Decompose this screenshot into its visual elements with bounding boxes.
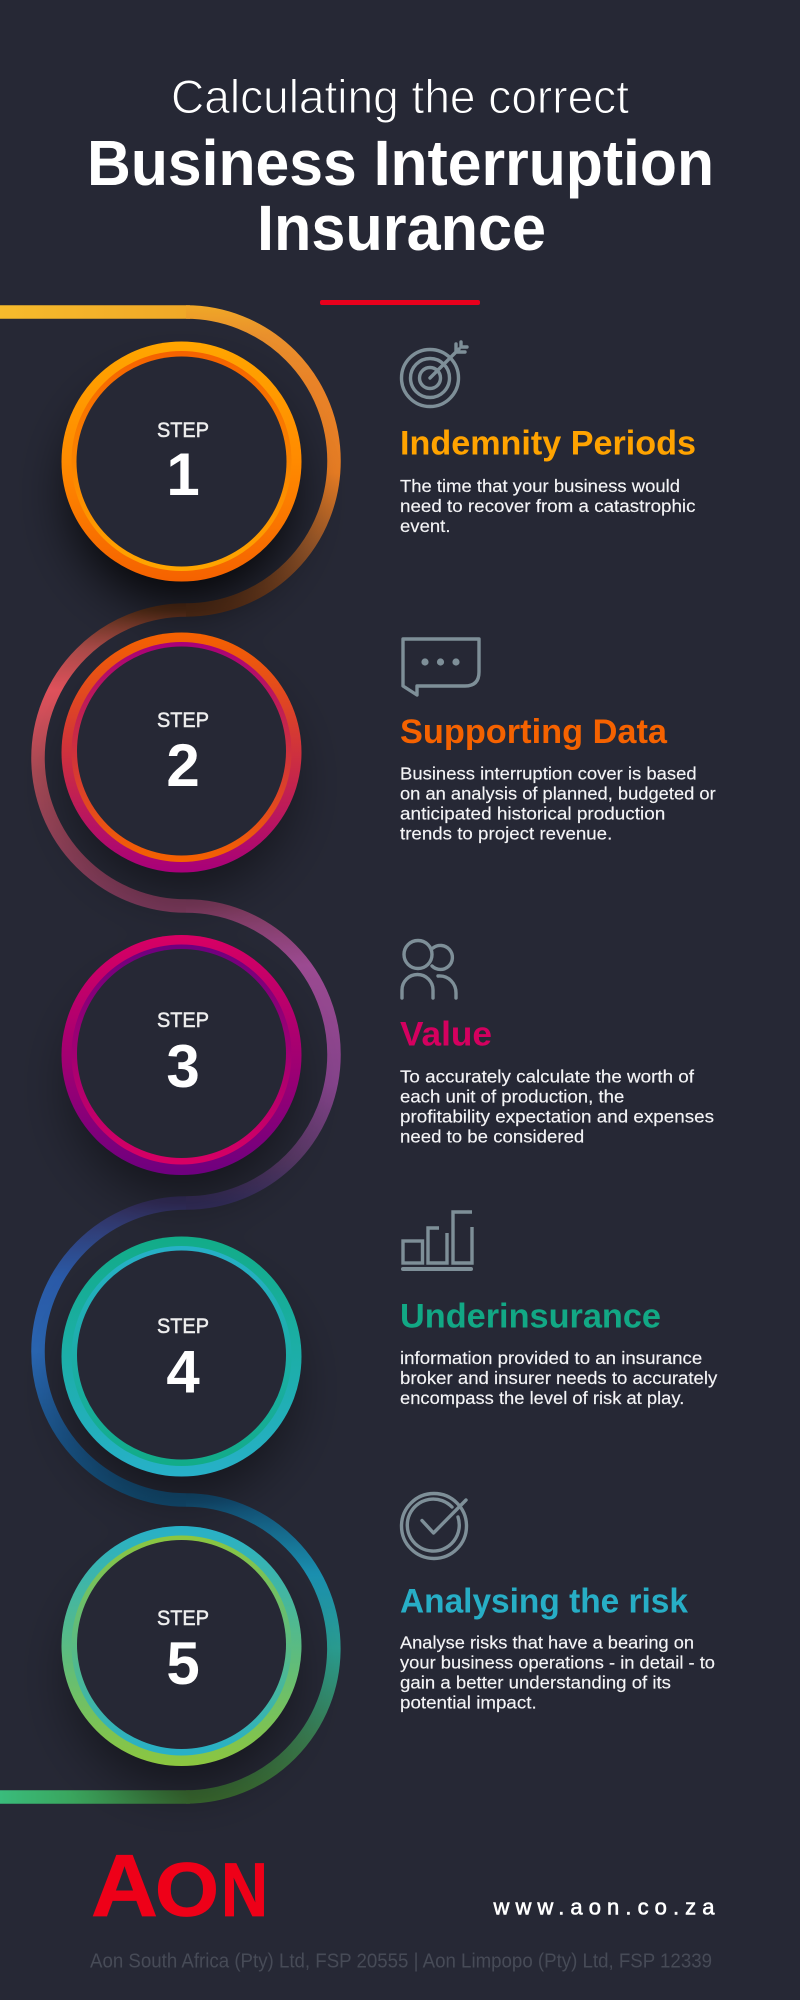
body text: The time that your business would — [400, 476, 680, 496]
heading: Indemnity Periods — [400, 424, 696, 462]
body text — [400, 1066, 714, 1146]
step 1 label: STEP — [157, 419, 209, 442]
icon: bar chart — [403, 1212, 472, 1269]
Aon logo — [91, 1836, 268, 1935]
body text: potential impact. — [400, 1693, 537, 1713]
step 4 number: 4 — [166, 1338, 200, 1406]
body text: profitability expectation and expenses — [400, 1106, 714, 1126]
heading: Analysing the risk — [400, 1582, 688, 1620]
title line: bold 2: Insurance — [257, 192, 546, 264]
body text: encompass the level of risk at play. — [400, 1388, 684, 1408]
title line: bold 1: Business Interruption — [87, 127, 714, 199]
heading: Value — [400, 1016, 492, 1054]
body text: each unit of production, the — [400, 1086, 624, 1106]
body text: Business interruption cover is based — [400, 764, 697, 784]
step 1 number: 1 — [166, 441, 200, 508]
icon: target with arrow — [402, 342, 467, 406]
body text: need to be considered — [400, 1126, 584, 1146]
body text: Analyse risks that have a bearing on — [400, 1633, 694, 1653]
panel: supporting data — [400, 639, 716, 844]
body text: broker and insurer needs to accurately — [400, 1368, 718, 1388]
body text: To accurately calculate the worth of — [400, 1066, 694, 1086]
panel: analysing the risk — [400, 1494, 715, 1713]
body text — [400, 1633, 715, 1713]
step 2 circle — [62, 632, 302, 872]
heading: Underinsurance — [400, 1298, 661, 1336]
circle shadows — [74, 386, 290, 1785]
icon: two people — [402, 940, 456, 998]
website: www.aon.co.za — [492, 1894, 715, 1919]
Aon logo: O — [155, 1848, 219, 1933]
icon: speech bubble — [403, 639, 479, 695]
step 2 number: 2 — [166, 732, 200, 799]
body text: need to recover from a catastrophic — [400, 496, 696, 516]
step 1 circle — [62, 342, 302, 582]
body text — [400, 476, 696, 536]
body text: event. — [400, 516, 450, 536]
step 4 label: STEP — [157, 1315, 209, 1338]
body text: information provided to an insurance — [400, 1348, 702, 1368]
step 3 circle — [62, 935, 302, 1175]
panel: indemnity periods — [400, 342, 696, 536]
step 2 label: STEP — [157, 709, 209, 732]
footer legal text: Aon South Africa (Pty) Ltd, FSP 20555 | Aon Limpopo (Pty) Ltd, FSP 12339 — [90, 1951, 712, 1973]
body text: trends to project revenue. — [400, 824, 612, 844]
body text: anticipated historical production — [400, 804, 665, 824]
step 5 label: STEP — [157, 1607, 209, 1630]
title — [87, 70, 714, 264]
step 5 circle — [62, 1526, 302, 1766]
panel: value — [400, 940, 714, 1146]
icon: check in circle — [402, 1494, 466, 1558]
step 3 number: 3 — [166, 1033, 200, 1100]
winding gradient track — [0, 312, 334, 1797]
heading: Supporting Data — [400, 713, 668, 751]
panel: underinsurance — [400, 1212, 718, 1408]
body text: on an analysis of planned, budgeted or — [400, 784, 716, 804]
body text — [400, 764, 716, 844]
step 3 label: STEP — [157, 1009, 209, 1032]
Aon logo: A — [91, 1836, 158, 1935]
body text — [400, 1348, 718, 1408]
step 5 number: 5 — [166, 1630, 200, 1697]
title line: light: Calculating the correct — [171, 70, 629, 123]
Aon logo: N — [221, 1848, 268, 1933]
red divider — [320, 300, 480, 305]
body text: your business operations - in detail - to — [400, 1653, 715, 1673]
body text: gain a better understanding of its — [400, 1673, 671, 1693]
step 4 circle — [62, 1236, 302, 1476]
